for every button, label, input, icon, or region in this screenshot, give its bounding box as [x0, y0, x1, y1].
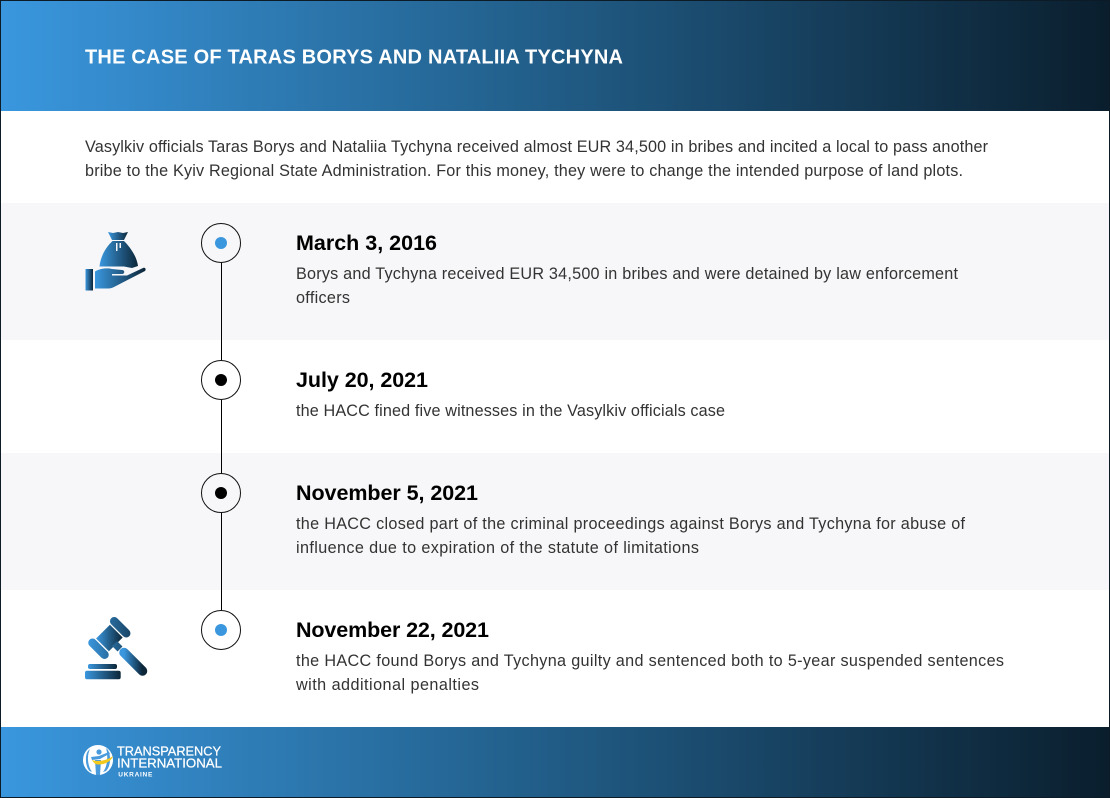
event: November 5, 2021: influence due to expiration of the statute of limitations	[296, 539, 699, 557]
event: March 3, 2016	[296, 231, 958, 307]
event: November 22, 2021: November 22, 2021	[296, 618, 489, 642]
icon: gavel	[85, 621, 142, 679]
logo: Transparency International Ukraine: INTERNATIONAL	[117, 756, 222, 770]
event: November 5, 2021: November 5, 2021	[296, 481, 478, 505]
row background: November 5, 2021	[0, 453, 1110, 590]
event: November 22, 2021	[295, 618, 1004, 694]
event: March 3, 2016: officers	[296, 289, 350, 307]
event: July 20, 2021: July 20, 2021	[296, 368, 428, 392]
event: March 3, 2016: Borys and Tychyna received EUR 34,500 in bribes and were detained by law enforcement	[296, 265, 958, 283]
event: November 5, 2021	[296, 481, 966, 557]
event: November 22, 2021: with additional penalties	[295, 676, 479, 694]
event: March 3, 2016: March 3, 2016	[296, 231, 437, 255]
event: July 20, 2021	[296, 368, 725, 420]
timeline line	[221, 243, 222, 630]
timeline marker: March 3, 2016	[202, 224, 240, 262]
icon: money bag on hand	[86, 232, 146, 290]
title: THE CASE OF TARAS BORYS AND NATALIIA TYCHYNA	[85, 46, 623, 68]
event: July 20, 2021: the HACC fined five witnesses in the Vasylkiv officials case	[296, 402, 725, 420]
logo: Transparency International Ukraine: UKRAINE	[118, 772, 153, 779]
intro text: Vasylkiv officials Taras Borys and Nataliia Tychyna received almost EUR 34,500 in bribes and incited a local to pass another	[85, 138, 989, 156]
intro text	[85, 138, 989, 180]
event: November 5, 2021: the HACC closed part of the criminal proceedings against Borys and Tychyna for abuse of	[296, 515, 966, 533]
logo emblem	[83, 745, 113, 775]
intro text: bribe to the Kyiv Regional State Administration. For this money, they were to change the intended purpose of land plots.	[85, 162, 963, 180]
event: November 22, 2021: the HACC found Borys and Tychyna guilty and sentenced both to 5-year suspended sentences	[296, 652, 1004, 670]
header band	[0, 0, 1110, 111]
logo wordmark: TRANSPARENCY	[117, 743, 221, 758]
row background: March 3, 2016	[0, 203, 1110, 340]
timeline marker: November 22, 2021	[202, 610, 240, 650]
timeline marker: July 20, 2021	[202, 360, 240, 400]
logo: Transparency International Ukraine	[83, 743, 222, 779]
footer band	[0, 727, 1110, 798]
timeline marker: November 5, 2021	[202, 474, 240, 512]
